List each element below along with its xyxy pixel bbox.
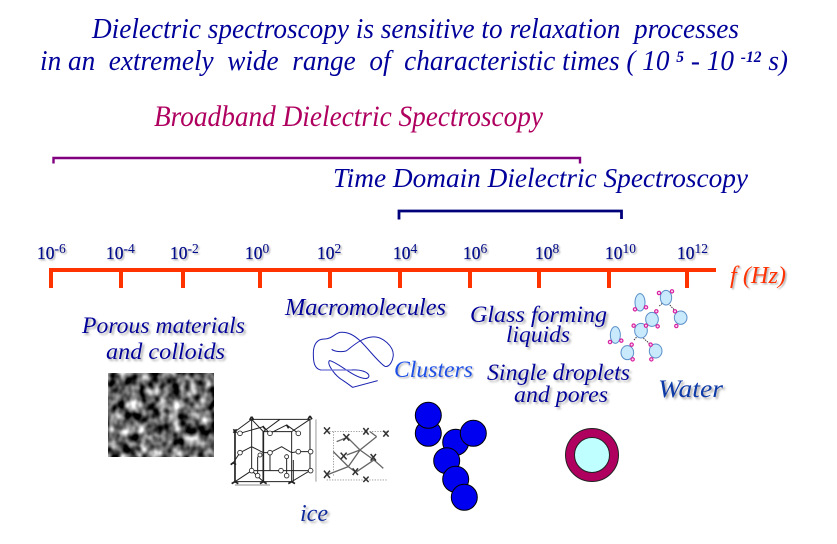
bracket: broadband range: [54, 158, 580, 164]
label: glass forming liquids: liquids: [506, 322, 570, 347]
axis labels: -4: [124, 241, 135, 256]
axis labels: 2: [334, 241, 341, 256]
axis labels: -6: [54, 241, 66, 256]
label: macromolecules: Macromolecules: [284, 295, 446, 321]
title: -12: [741, 49, 762, 66]
axis labels: 10: [393, 243, 410, 263]
label: glass forming liquids: Glass forming: [470, 302, 607, 327]
axis labels: 10: [317, 243, 334, 263]
label: single droplets and pores: Single droplets: [487, 360, 630, 385]
axis line and ticks: [49, 270, 716, 288]
axis unit label: f (Hz): [730, 263, 786, 289]
label: clusters: Clusters: [394, 357, 473, 382]
axis labels: 10: [245, 243, 262, 263]
axis labels: 10: [463, 243, 480, 263]
micrograph: porous material: [108, 373, 214, 457]
axis labels: 6: [480, 241, 488, 256]
title: [40, 14, 788, 77]
title: Dielectric spectroscopy is sensitive to relaxation processes: [91, 14, 739, 45]
axis labels: 12: [694, 241, 708, 256]
title: s): [762, 46, 788, 77]
label: water: Water: [658, 376, 723, 403]
icon: polymer chain: [313, 332, 393, 387]
label: single droplets and pores: [487, 360, 630, 407]
label: porous materials: [81, 313, 245, 364]
icon: water molecules: [608, 290, 687, 361]
heading: Time Domain Dielectric Spectroscopy: Time Domain Dielectric Spectroscopy: [333, 163, 748, 193]
axis labels: 8: [552, 241, 560, 256]
axis labels: 10: [605, 243, 622, 263]
axis labels: -2: [188, 241, 199, 256]
second lattice view: [324, 427, 389, 482]
axis labels: 10: [677, 243, 694, 263]
axis labels: [37, 241, 708, 263]
label: ice: ice: [300, 501, 328, 527]
title: 5: [676, 49, 684, 66]
label: glass forming liquids: [470, 302, 607, 347]
label: single droplets and pores: and pores: [514, 382, 608, 407]
axis labels: 10: [37, 243, 54, 263]
heading: Broadband Dielectric Spectroscopy: Broadband Dielectric Spectroscopy: [154, 100, 544, 133]
title: in an extremely wide range of characteristic times ( 10: [40, 46, 688, 77]
axis labels: 0: [262, 241, 270, 256]
icon: cluster of spheres: [415, 402, 486, 510]
axis labels: 10: [170, 243, 188, 263]
axis labels: 10: [106, 243, 124, 263]
axis labels: 10: [622, 241, 636, 256]
axis labels: 10: [535, 243, 552, 263]
label: porous materials: and colloids: [106, 339, 225, 364]
bracket: time domain range: [399, 211, 622, 220]
axis labels: 4: [410, 241, 418, 256]
label: porous materials: Porous materials: [81, 313, 245, 338]
icon: droplet ring: [566, 428, 618, 482]
frequency axis: [37, 241, 716, 288]
diagram: ice lattice: [231, 416, 389, 485]
title: - 10: [684, 46, 741, 77]
